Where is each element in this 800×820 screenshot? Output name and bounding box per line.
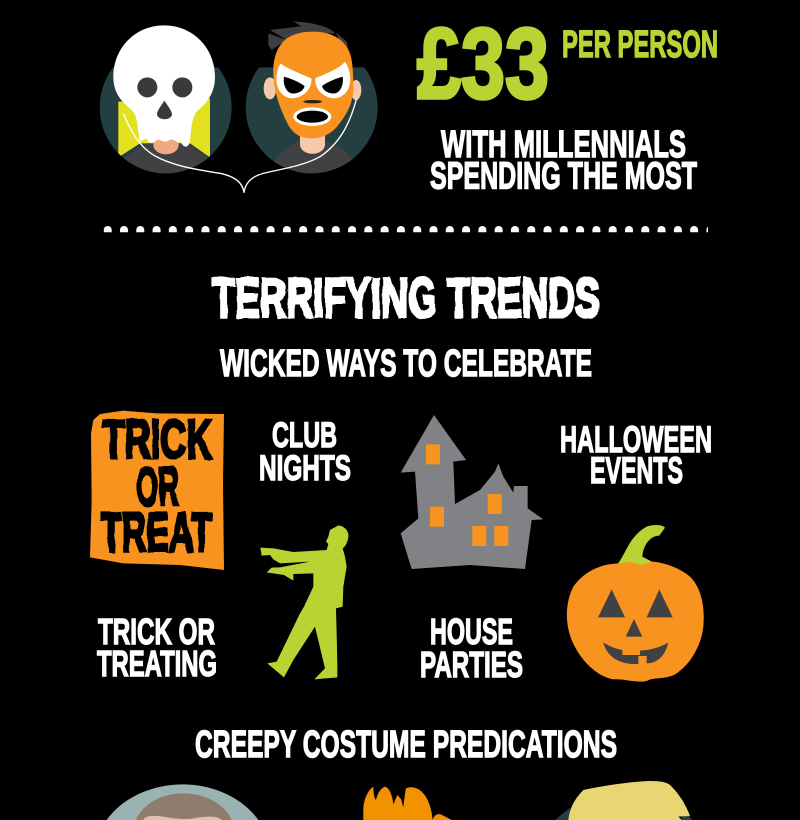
panel: trick or treat sign: OR [136,455,179,517]
label: house parties [420,611,523,685]
label: club nights: NIGHTS [259,449,351,488]
spend figure: £33 [417,8,549,120]
subtitle: WICKED WAYS TO CELEBRATE [220,343,592,385]
label: halloween events: EVENTS [590,450,683,491]
label: house parties: HOUSE [430,611,513,652]
label: house parties: PARTIES [420,644,523,685]
title: TERRIFYING TRENDS [212,266,600,329]
label: trick or treating: TREATING [97,643,217,684]
label: trick or treating [97,611,217,684]
label: trick or treating: TRICK OR [98,611,215,652]
infographic canvas [90,22,717,820]
label: club nights [259,416,351,488]
icon: zombie [260,525,348,679]
icon: skull mask character [100,25,232,173]
label: halloween events [560,419,712,491]
icon: partial costume character middle [363,787,452,820]
icon: partial costume character right [555,781,692,820]
icon: partial costume character left [107,784,258,820]
panel: trick or treat sign: TREAT [101,501,212,563]
panel: trick or treat sign: TRICK [103,408,212,470]
earphone wire [123,98,357,193]
icon: haunted house [401,415,543,569]
icon: wrestler mask character [246,22,378,173]
icon: jack-o-lantern pumpkin [567,525,704,682]
millennials caption [430,124,697,198]
millennials caption: WITH MILLENNIALS [441,124,686,166]
label: club nights: CLUB [272,416,337,455]
label: halloween events: HALLOWEEN [560,419,712,460]
panel: trick or treat sign [90,408,224,570]
